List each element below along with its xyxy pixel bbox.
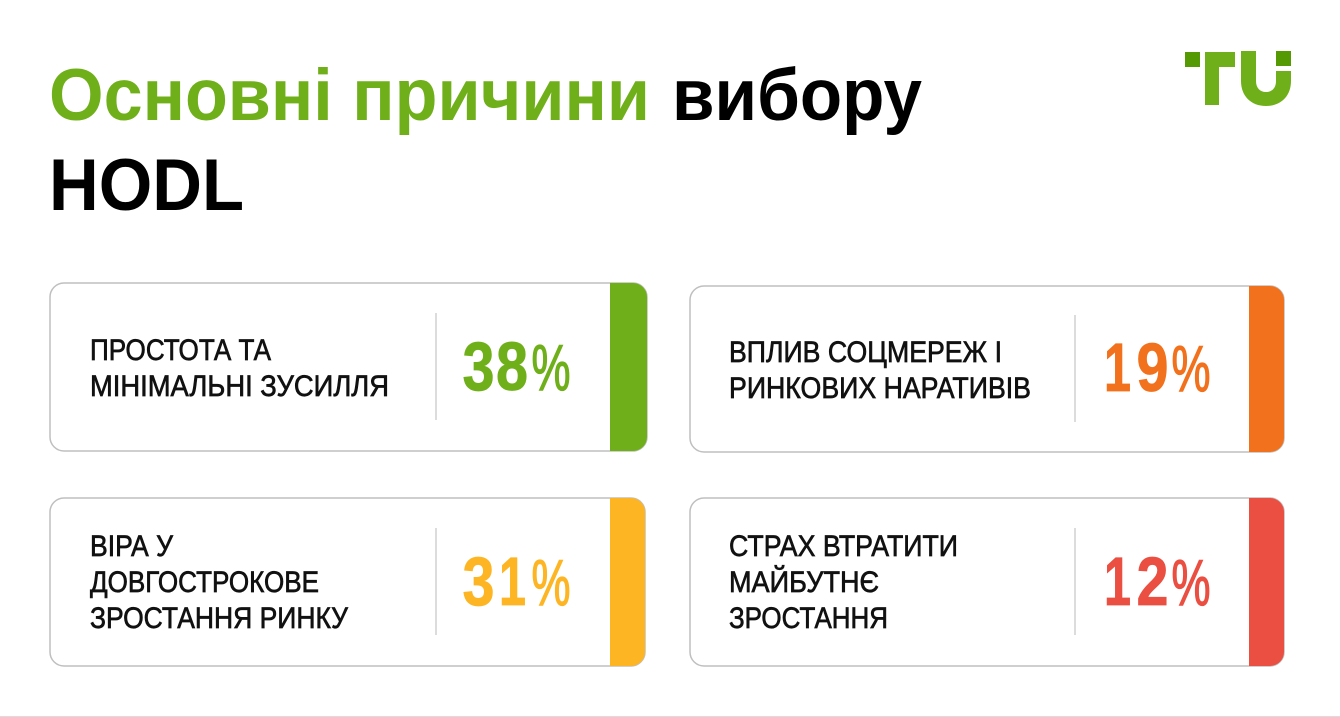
title: Основні причини <box>49 55 650 136</box>
title <box>49 55 922 226</box>
value: 3 <box>462 543 494 620</box>
label <box>90 334 389 403</box>
label: ДОВГОСТРОКОВЕ <box>90 566 319 599</box>
card: fear of missing out 12% <box>690 498 1284 666</box>
value <box>1104 329 1210 406</box>
label: ВПЛИВ СОЦМЕРЕЖ І <box>729 336 1002 369</box>
value <box>462 543 570 620</box>
value <box>462 328 570 405</box>
label <box>90 530 349 635</box>
value: 1 <box>1104 329 1131 406</box>
title: вибору <box>672 55 922 136</box>
value: 3 <box>462 328 494 405</box>
value: % <box>532 331 570 404</box>
value <box>1104 543 1210 620</box>
value: 2 <box>1136 543 1168 620</box>
label: ПРОСТОТА ТА <box>90 334 271 367</box>
label: ЗРОСТАННЯ <box>729 602 888 635</box>
title: HODL <box>49 145 244 226</box>
value: 1 <box>499 543 526 620</box>
value: % <box>1172 546 1210 619</box>
label <box>729 336 1031 405</box>
card: social media 19% <box>690 286 1284 452</box>
value: 9 <box>1136 329 1168 406</box>
label: СТРАХ ВТРАТИТИ <box>729 530 958 563</box>
value: % <box>1172 332 1210 405</box>
value: % <box>532 546 570 619</box>
card: simplicity 38% <box>50 283 647 451</box>
label: ЗРОСТАННЯ РИНКУ <box>90 602 349 635</box>
label: МАЙБУТНЄ <box>729 565 879 599</box>
label: ВІРА У <box>90 530 174 563</box>
card: long-term belief 31% <box>50 498 645 666</box>
label: РИНКОВИХ НАРАТИВІВ <box>729 372 1031 405</box>
value: 1 <box>1104 543 1131 620</box>
label <box>729 530 958 635</box>
logo <box>1185 51 1291 106</box>
value: 8 <box>496 328 528 405</box>
label: МІНІМАЛЬНІ ЗУСИЛЛЯ <box>90 370 389 403</box>
